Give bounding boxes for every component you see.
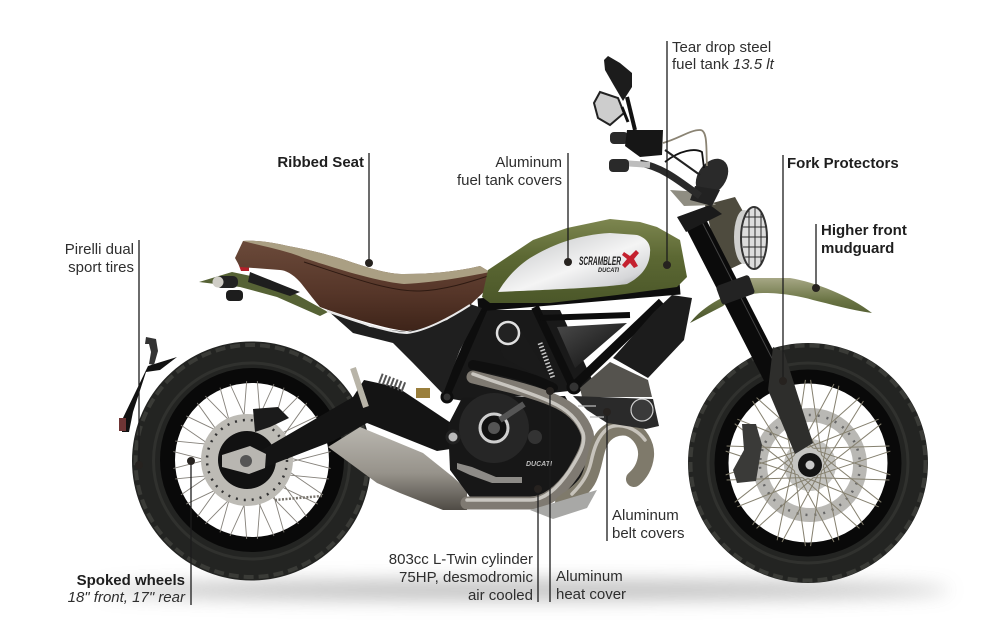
label: Tear drop steel fuel tank: Tear drop steel (672, 39, 771, 56)
fork (693, 216, 822, 477)
label: Pirelli dual sport tires: sport tires (68, 259, 134, 276)
frame (442, 288, 680, 402)
rear wheel (136, 345, 368, 577)
label: Spoked wheels: Spoked wheels (77, 572, 185, 589)
label: Higher front mudguard: Higher front (821, 222, 907, 239)
exhaust pipes (467, 365, 646, 503)
motorcycle (119, 56, 926, 580)
label: Higher front mudguard: mudguard (821, 240, 894, 257)
front wheel (690, 346, 926, 580)
rear tail section (199, 263, 328, 316)
label: Pirelli dual sport tires (65, 240, 143, 469)
label: Ribbed Seat: Ribbed Seat (277, 154, 364, 171)
label: Aluminum fuel tank covers: Aluminum (495, 154, 562, 171)
label: Spoked wheels: 18" front, 17" rear (68, 589, 186, 606)
engine: DUCATI (526, 461, 553, 468)
label: Fork Protectors: Fork Protectors (787, 155, 899, 172)
label: Ribbed Seat (277, 153, 373, 267)
label: Aluminum belt covers (603, 408, 685, 542)
gauge and top clamp (670, 153, 735, 232)
heat cover (530, 490, 597, 519)
rear axle bolt (240, 455, 252, 467)
belt cover (573, 396, 659, 429)
label: Aluminum heat cover: Aluminum (556, 568, 623, 585)
label: Tear drop steel fuel tank: fuel tank 13.5 lt (672, 56, 775, 73)
label: 803cc L-Twin cylinder: air cooled (468, 587, 533, 604)
swingarm (262, 380, 464, 468)
label: 803cc L-Twin cylinder: 75HP, desmodromic (399, 569, 533, 586)
label: Aluminum fuel tank covers: fuel tank covers (457, 172, 562, 189)
label: 803cc L-Twin cylinder (389, 485, 542, 604)
label: Fork Protectors (779, 155, 899, 385)
mirrors (594, 56, 635, 130)
label: Aluminum belt covers: belt covers (612, 525, 685, 542)
fuel tank: DUCATI (598, 267, 619, 274)
label: Spoked wheels (68, 457, 195, 606)
ribbed seat (235, 241, 490, 333)
rear number plate bracket (119, 337, 177, 432)
headlight (705, 197, 767, 270)
fuel tank: SCRAMBLER (579, 254, 621, 268)
ground shadow (100, 580, 950, 600)
exhaust muffler (328, 427, 467, 510)
rear axle slider (222, 446, 266, 474)
frame side panels (492, 295, 692, 397)
dark engine bay fill (446, 310, 596, 402)
label: Tear drop steel fuel tank (663, 39, 775, 269)
label: Pirelli dual sport tires: Pirelli dual (65, 241, 134, 258)
rear subframe panel (327, 304, 482, 394)
label: Aluminum heat cover (546, 387, 626, 603)
label: Aluminum heat cover: heat cover (556, 586, 626, 603)
label: Higher front mudguard (812, 222, 907, 292)
label: Aluminum belt covers: Aluminum (612, 507, 679, 524)
label: 803cc L-Twin cylinder: 803cc L-Twin cylinder (389, 551, 533, 568)
label: Aluminum fuel tank covers (457, 153, 572, 266)
engine (447, 393, 590, 497)
handlebars and controls (609, 130, 707, 196)
front fender (690, 278, 872, 323)
rear peg and shock (353, 368, 430, 407)
fuel tank (482, 219, 687, 303)
